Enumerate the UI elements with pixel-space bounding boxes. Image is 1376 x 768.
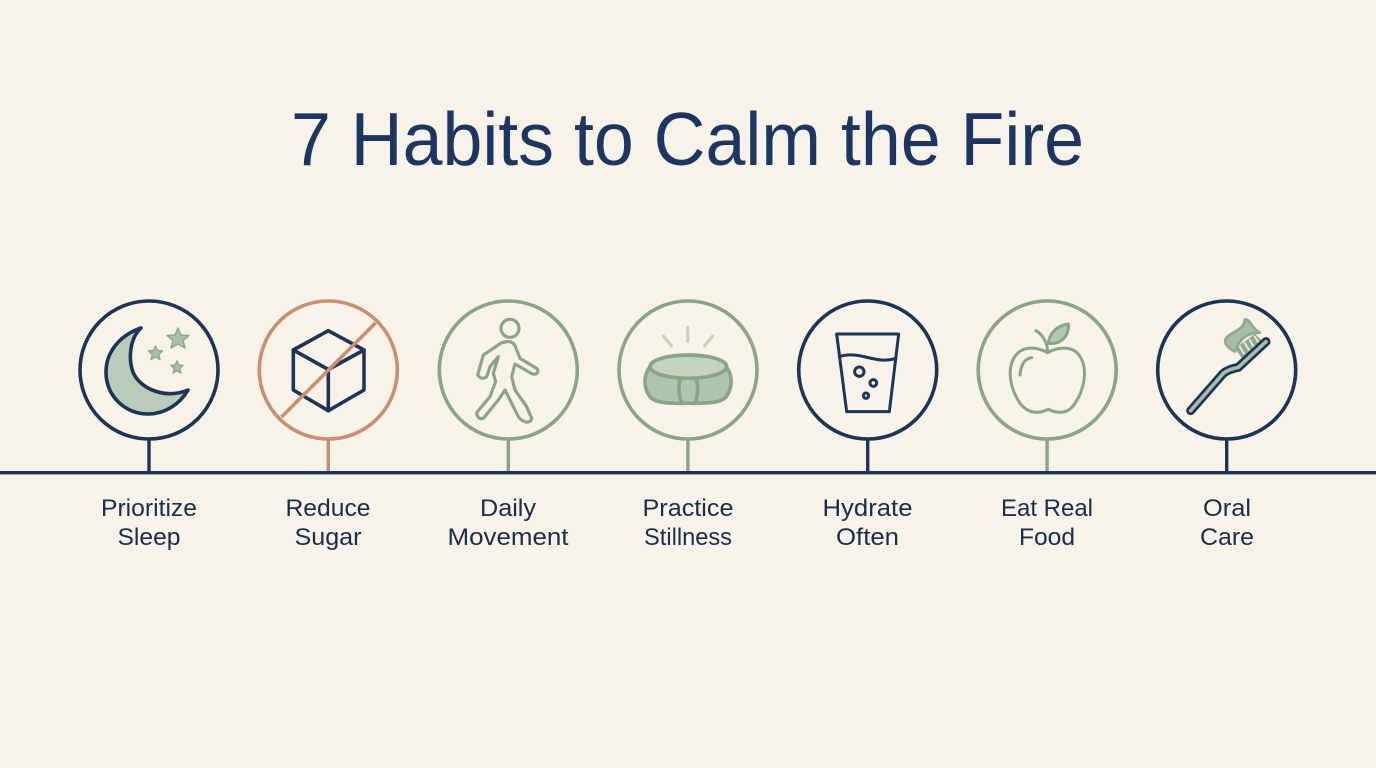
habit: Reduce Sugar [259, 301, 397, 551]
icon: glass of water [837, 334, 899, 412]
label [1200, 495, 1254, 551]
icon circle [1158, 301, 1296, 439]
icon: stars [148, 328, 189, 373]
title: 7 Habits to Calm the Fire [291, 97, 1084, 181]
icon: crescent moon [106, 328, 188, 414]
connector stem [327, 440, 330, 471]
label: Prioritize [101, 495, 197, 522]
label: Food [1019, 524, 1075, 551]
connector stem [1045, 440, 1049, 471]
label: Sugar [294, 524, 362, 551]
label [101, 495, 197, 551]
label [286, 495, 370, 551]
icon circle [799, 301, 937, 439]
habit: Hydrate Often [799, 301, 937, 551]
label: Often [836, 524, 899, 551]
label: Reduce [286, 495, 370, 522]
connector stem [686, 440, 690, 471]
timeline axis [0, 471, 1376, 474]
icon circle [80, 301, 218, 439]
connector stem [507, 440, 510, 471]
habit: Oral Care [1158, 301, 1296, 551]
label: Practice [642, 495, 734, 522]
connector stem [866, 440, 869, 472]
connector stem [1225, 440, 1228, 472]
icon circle with slash [259, 301, 397, 439]
label: Movement [448, 524, 569, 551]
connector stem [147, 440, 151, 472]
icon circle [439, 301, 577, 439]
label: Hydrate [822, 495, 912, 522]
icon circle [978, 301, 1116, 439]
icon circle [619, 301, 757, 439]
icon: apple [1010, 324, 1085, 412]
label [642, 495, 734, 551]
label: Daily [480, 495, 536, 522]
label: Care [1200, 524, 1254, 551]
habit: Daily Movement [439, 301, 577, 551]
label [1001, 495, 1093, 551]
label: Oral [1203, 495, 1251, 522]
label: Eat Real [1001, 495, 1093, 522]
icon: toothbrush [1191, 319, 1266, 411]
habit: Prioritize Sleep [80, 301, 218, 551]
icon: sugar cube [293, 331, 364, 411]
label: Stillness [644, 524, 732, 551]
icon: walking person [477, 319, 538, 422]
icon: meditation cushion [645, 327, 731, 403]
label [448, 495, 569, 551]
label [822, 495, 912, 551]
habit: Eat Real Food [978, 301, 1116, 551]
label: Sleep [118, 524, 180, 551]
habit: Practice Stillness [619, 301, 757, 551]
